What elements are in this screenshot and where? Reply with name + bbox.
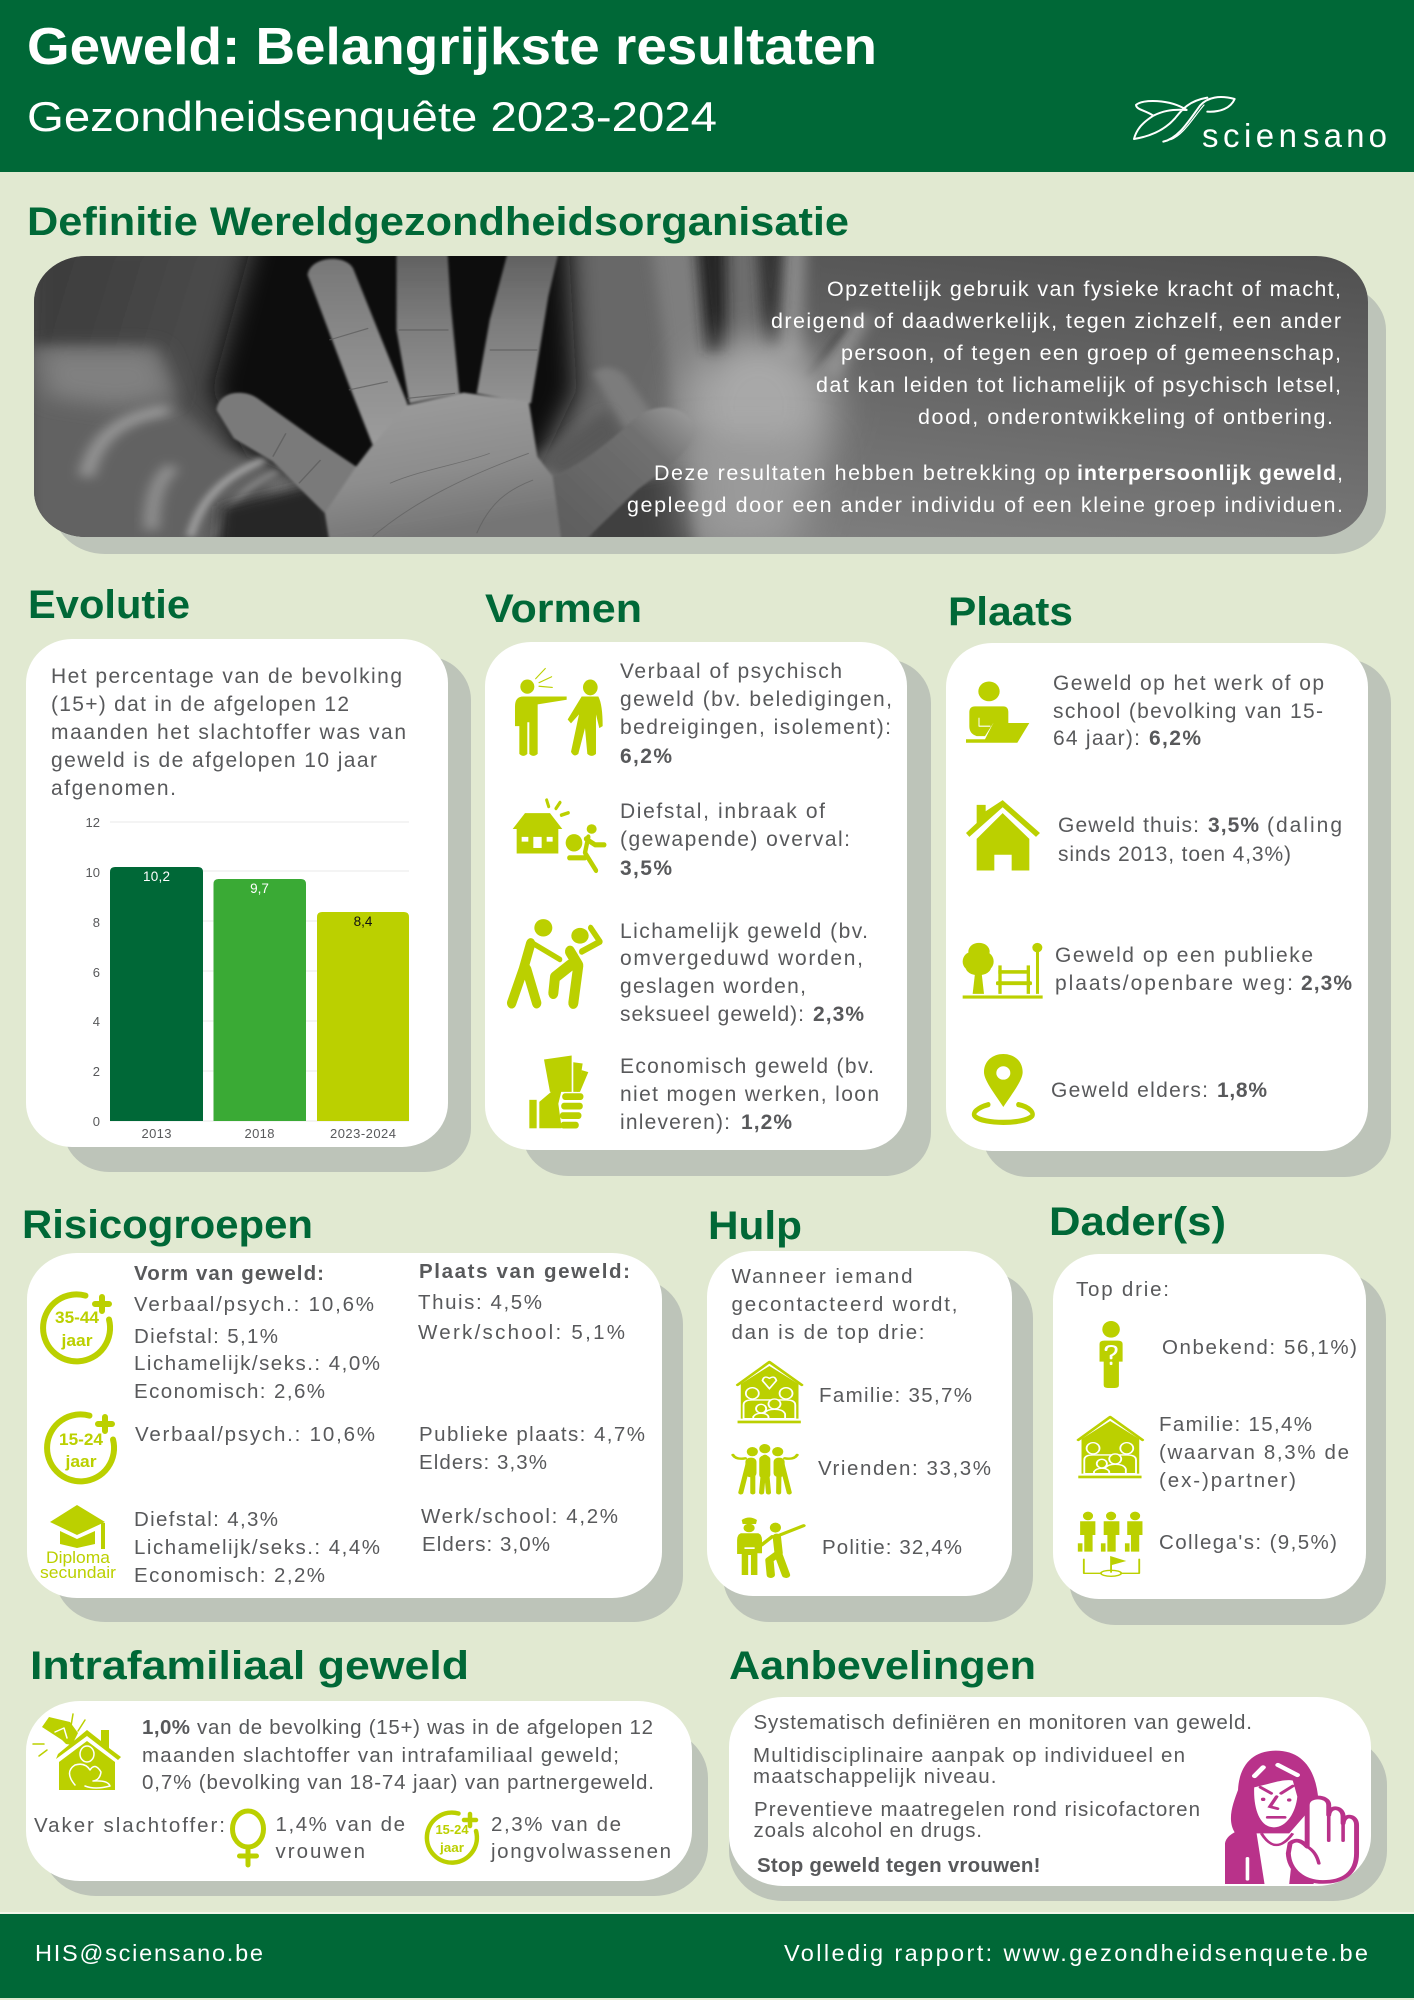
text block: evolutie: geweld is de afgelopen 10 jaar: [51, 749, 377, 772]
panel: risicogroepen: [27, 1253, 683, 1622]
text block: hulp top three: Vrienden: 33,3%: [818, 1457, 991, 1480]
text block: vormen: inleveren):: [620, 1111, 730, 1134]
panel: hulp: [707, 1251, 1033, 1622]
text block: vormen: 1,2%: [741, 1111, 792, 1134]
text block: plaats: 6,2%: [1149, 727, 1201, 750]
text block: aanbevelingen: Multidisciplinaire aanpak op individueel en: [753, 1744, 1185, 1767]
text block: hulp top three: Politie: 32,4%: [822, 1536, 962, 1559]
text block: aanbevelingen: zoals alcohol en drugs.: [754, 1819, 982, 1842]
logo: sciensano: scien: [1202, 117, 1297, 154]
icon: age 15-24: 15-24: [59, 1430, 104, 1449]
text block: vorm van geweld: Verbaal/psych.: 10,6%: [135, 1423, 375, 1446]
heading: definitie: Definitie Wereldgezondheidsorganisatie: [27, 200, 849, 244]
panel: intrafamiliaal geweld: [26, 1701, 708, 1896]
text block: vorm van geweld: Vorm van geweld:: [134, 1262, 324, 1285]
icon: age 35-44: 35-44: [55, 1308, 100, 1327]
text block: definitie: persoon, of tegen een groep of gemeenschap,: [841, 341, 1341, 365]
text block: daders: (waarvan 8,3% de: [1159, 1441, 1349, 1464]
icon: family: [738, 1362, 802, 1423]
text block: daders: Collega's: (9,5%): [1159, 1531, 1337, 1554]
title: Geweld: Belangrijkste resultaten: [27, 18, 877, 76]
text block: aanbevelingen: Systematisch definiëren en monitoren van geweld.: [754, 1711, 1252, 1734]
bar chart: 0: [93, 1114, 100, 1129]
icon: age 15-24: [47, 1414, 114, 1481]
text block: plaats van geweld: Elders: 3,3%: [419, 1451, 547, 1474]
text block: definitie: [627, 277, 1343, 517]
text block: vormen: [620, 660, 892, 1134]
text block: evolutie: (15+) dat in de afgelopen 12: [51, 693, 349, 716]
text block: plaats van geweld: Plaats van geweld:: [419, 1260, 630, 1283]
text block: vormen: (gewapende) overval:: [620, 828, 850, 851]
text block: vormen: Economisch geweld (bv.: [620, 1055, 874, 1078]
text block: plaats: 3,5%: [1208, 814, 1259, 837]
text block: vorm van geweld: Economisch: 2,6%: [134, 1380, 325, 1403]
text block: vormen: Diefstal, inbraak of: [620, 800, 825, 823]
text block: plaats van geweld: [418, 1260, 645, 1556]
text block: definitie: Opzettelijk gebruik van fysieke kracht of macht,: [827, 277, 1341, 301]
text block: definitie: gepleegd door een ander individu of een kleine groep individuen.: [627, 493, 1343, 517]
heading: daders: Dader(s): [1049, 1200, 1226, 1244]
icon: secondary diploma: secundair: [40, 1563, 116, 1582]
footer: report link: Volledig rapport: www.gezondheidsenquete.be: [784, 1940, 1368, 1966]
text block: intrafamiliaal: 0,7% (bevolking van 18-74 jaar) van partnergeweld.: [142, 1771, 654, 1794]
icon: physical violence: [512, 919, 600, 1003]
text block: vormen: geslagen worden,: [620, 975, 806, 998]
text block: definitie: dood, onderontwikkeling of ontbering.: [918, 405, 1333, 429]
icon: verbal aggression: [515, 668, 603, 756]
panel: definitie hero photo: [21, 230, 1386, 557]
icon: age 15-24 small: [427, 1813, 477, 1863]
icon: secondary diploma: Diploma: [46, 1548, 111, 1567]
text block: plaats: Geweld elders:: [1051, 1079, 1208, 1102]
text block: vorm van geweld: Verbaal/psych.: 10,6%: [134, 1293, 374, 1316]
text block: hulp top three: [818, 1384, 991, 1559]
icon: age 15-24: jaar: [64, 1452, 97, 1471]
text block: plaats: 1,8%: [1217, 1079, 1267, 1102]
text block: plaats: 2,3%: [1301, 972, 1352, 995]
text block: vormen: 3,5%: [620, 857, 672, 880]
heading: plaats: Plaats: [948, 590, 1073, 634]
text block: vormen: seksueel geweld):: [620, 1003, 804, 1026]
heading: vormen: Vormen: [485, 587, 642, 631]
bar chart: [86, 815, 409, 1141]
bar chart: 2: [93, 1064, 100, 1079]
text block: plaats: Geweld thuis:: [1058, 814, 1199, 837]
text block: vorm van geweld: Lichamelijk/seks.: 4,4%: [134, 1536, 380, 1559]
text block: vorm van geweld: Diefstal: 5,1%: [134, 1325, 278, 1348]
text block: intrafamiliaal: [34, 1716, 654, 1837]
icon: unknown person: [1100, 1321, 1123, 1388]
heading: evolutie: Evolutie: [28, 583, 190, 627]
text block: definitie: interpersoonlijk geweld: [1077, 461, 1336, 485]
text block: hulp top three: Familie: 35,7%: [819, 1384, 972, 1407]
text block: aanbevelingen: maatschappelijk niveau.: [753, 1765, 996, 1788]
bar chart: 2013: [142, 1126, 172, 1141]
bar chart: 8,4: [354, 914, 373, 929]
heading: hulp: Hulp: [708, 1204, 802, 1248]
icon: home: [966, 800, 1040, 871]
bar chart: 2018: [244, 1126, 274, 1141]
footer band: [0, 1912, 1414, 1998]
text block: daders: Onbekend: 56,1%): [1162, 1336, 1357, 1359]
text block: evolutie: maanden het slachtoffer was van: [51, 721, 406, 744]
text block: intrafamiliaal: van de bevolking (15+) was in de afgelopen 12: [197, 1716, 653, 1739]
icon: woman raising stop hand: [1225, 1751, 1357, 1884]
bar chart: 9,7: [250, 881, 269, 896]
logo: sciensano: [1134, 97, 1387, 154]
bar chart: 6: [93, 965, 100, 980]
icon: friends: [733, 1444, 797, 1493]
text block: vormen: Verbaal of psychisch: [620, 660, 842, 683]
text block: women: [276, 1813, 405, 1863]
main hand: [216, 247, 694, 540]
text block: definitie: dreigend of daadwerkelijk, tegen zichzelf, een ander: [771, 309, 1341, 333]
header band: [0, 0, 1414, 172]
text block: definitie: Deze resultaten hebben betrekking op: [654, 461, 1070, 485]
bar: 2013: [110, 867, 203, 1121]
heading: intrafamiliaal geweld: Intrafamiliaal geweld: [30, 1644, 469, 1688]
icon: age 15-24 small: 15-24: [436, 1823, 469, 1837]
text block: vormen: 2,3%: [813, 1003, 864, 1026]
bar: 2023-2024: [317, 912, 409, 1121]
text block: vorm van geweld: Lichamelijk/seks.: 4,0%: [134, 1352, 380, 1375]
text block: daders: [1076, 1278, 1357, 1554]
panel: plaats: [946, 643, 1391, 1177]
icon: police: [737, 1517, 804, 1575]
text block: plaats van geweld: Publieke plaats: 4,7%: [419, 1423, 645, 1446]
text block: young adults: 2,3% van de: [491, 1813, 621, 1836]
photo: raised hands: [34, 256, 1368, 537]
text block: women: 1,4% van de: [276, 1813, 405, 1836]
text block: daders: (ex-)partner): [1159, 1469, 1296, 1492]
text block: daders: Familie: 15,4%: [1159, 1413, 1312, 1436]
icon: age 15-24 small: jaar: [439, 1841, 464, 1855]
text block: definitie: ,: [1337, 461, 1343, 485]
icon: burglary: [513, 800, 604, 871]
text block: plaats: Geweld op een publieke: [1055, 944, 1313, 967]
text block: plaats van geweld: Thuis: 4,5%: [418, 1291, 542, 1314]
icon: colleagues: [1078, 1512, 1142, 1576]
bar chart: 12: [86, 815, 100, 830]
text block: plaats: [1051, 672, 1352, 1102]
text block: aanbevelingen: Preventieve maatregelen rond risicofactoren: [754, 1798, 1200, 1821]
text block: hulp intro: dan is de top drie:: [732, 1321, 924, 1344]
icon: age 35-44: [43, 1294, 110, 1361]
text block: intrafamiliaal: Vaker slachtoffer:: [34, 1814, 225, 1837]
text block: vorm van geweld: Diefstal: 4,3%: [134, 1508, 278, 1531]
text block: intrafamiliaal: maanden slachtoffer van intrafamiliaal geweld;: [142, 1744, 619, 1767]
text block: plaats: Geweld op het werk of op: [1053, 672, 1324, 695]
icon: female symbol: [232, 1811, 264, 1865]
second hand: [650, 256, 707, 416]
panel: aanbevelingen: [729, 1697, 1387, 1901]
icon: work or school: [966, 682, 1029, 743]
bar: 2018: [214, 879, 306, 1121]
text block: vormen: Lichamelijk geweld (bv.: [620, 920, 868, 943]
text block: evolutie: Het percentage van de bevolking: [51, 665, 402, 688]
text block: intrafamiliaal: 1,0%: [142, 1716, 190, 1739]
icon: secondary diploma: [40, 1505, 116, 1582]
panel: evolutie: [26, 639, 471, 1172]
panel: daders: [1053, 1254, 1386, 1625]
text block: plaats: 64 jaar):: [1053, 727, 1140, 750]
text block: vormen: omvergeduwd worden,: [620, 947, 863, 970]
heading: risicogroepen: Risicogroepen: [22, 1203, 313, 1247]
text block: hulp intro: [732, 1265, 958, 1344]
text block: women: vrouwen: [276, 1840, 365, 1863]
text block: vormen: niet mogen werken, loon: [620, 1083, 879, 1106]
icon: family perpetrator: [1078, 1417, 1142, 1478]
bar chart: 2023-2024: [330, 1126, 396, 1141]
bar chart: 10,2: [143, 869, 170, 884]
text block: young adults: jongvolwassenen: [490, 1840, 671, 1863]
icon: age 35-44: jaar: [60, 1331, 93, 1350]
logo: sciensano: sano: [1303, 117, 1387, 154]
text block: vormen: bedreigingen, isolement):: [620, 716, 891, 739]
text block: vorm van geweld: [134, 1262, 380, 1587]
bar chart: 4: [93, 1014, 100, 1029]
text block: vormen: 6,2%: [620, 745, 672, 768]
text block: plaats van geweld: Werk/school: 5,1%: [418, 1321, 625, 1344]
text block: plaats van geweld: Werk/school: 4,2%: [421, 1505, 618, 1528]
text block: plaats: (daling: [1267, 814, 1342, 837]
text block: definitie: dat kan leiden tot lichamelijk of psychisch letsel,: [816, 373, 1341, 397]
text block: aanbevelingen: Stop geweld tegen vrouwen!: [757, 1854, 1040, 1877]
bar chart: 10: [86, 865, 100, 880]
footer: email: HIS@sciensano.be: [35, 1940, 263, 1966]
text block: hulp intro: Wanneer iemand: [732, 1265, 912, 1288]
icon: economic violence: [529, 1056, 588, 1128]
text block: plaats: plaats/openbare weg:: [1055, 972, 1293, 995]
text block: evolutie: [51, 665, 406, 800]
text block: daders: Top drie:: [1076, 1278, 1169, 1301]
icon: public place: [963, 943, 1043, 999]
heading: aanbevelingen: Aanbevelingen: [729, 1644, 1036, 1688]
bar chart: 8: [93, 915, 100, 930]
subtitle: Gezondheidsenquête 2023-2024: [27, 93, 717, 140]
icon: location pin: [974, 1054, 1033, 1122]
text block: plaats: sinds 2013, toen 4,3%): [1058, 843, 1291, 866]
text block: young adults: [490, 1813, 671, 1863]
text block: aanbevelingen: [753, 1711, 1252, 1877]
text block: hulp intro: gecontacteerd wordt,: [732, 1293, 958, 1316]
panel: vormen: [485, 642, 931, 1176]
text block: vormen: geweld (bv. beledigingen,: [620, 688, 892, 711]
text block: evolutie: afgenomen.: [51, 777, 176, 800]
icon: domestic violence house: [33, 1714, 121, 1790]
text block: plaats van geweld: Elders: 3,0%: [422, 1533, 550, 1556]
text block: vorm van geweld: Economisch: 2,2%: [134, 1564, 325, 1587]
text block: plaats: school (bevolking van 15-: [1053, 700, 1323, 723]
